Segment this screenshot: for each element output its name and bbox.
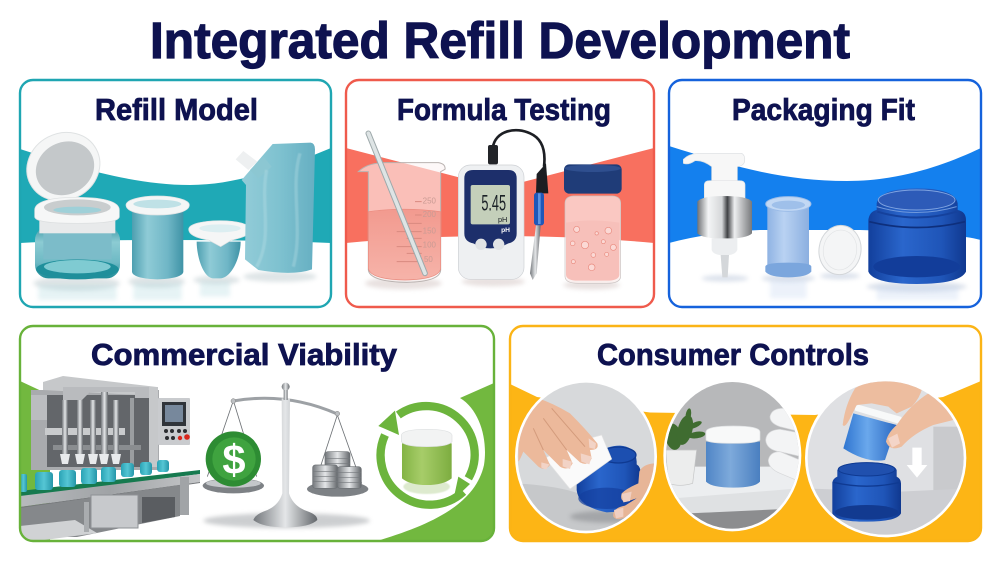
band: green corners <box>20 381 494 541</box>
photo: jar on shelf <box>663 377 803 533</box>
filling line machine <box>20 376 200 542</box>
artwork: balance scale and recycling jar: $ <box>222 436 246 483</box>
band: yellow field <box>510 381 981 541</box>
photo: wiping the jar <box>513 377 660 537</box>
lab items: beaker, pH meter and vial: 250 <box>423 196 437 205</box>
band: blue wave <box>669 146 981 243</box>
components: pump, inner cup, disc and blue jar <box>683 153 967 300</box>
band: teal wave <box>20 148 331 243</box>
heading: formula testing: Formula Testing <box>397 93 611 127</box>
lab items: beaker, pH meter and vial: 5.45 <box>481 191 506 216</box>
lab items: beaker, pH meter and vial: 150 <box>423 226 437 235</box>
artwork: balance scale and recycling jar <box>203 383 475 528</box>
border: yellow <box>510 326 981 541</box>
lab items: beaker, pH meter and vial: pH <box>501 227 510 234</box>
panel: consumer controls <box>510 326 981 541</box>
band: coral wave <box>346 148 654 243</box>
border: coral <box>346 80 654 307</box>
heading: consumer controls: Consumer Controls <box>597 338 869 372</box>
lab items: beaker, pH meter and vial: pH <box>498 215 507 224</box>
panel: commercial viability <box>20 326 494 542</box>
border: blue <box>669 80 981 307</box>
border: teal <box>20 80 331 307</box>
lab items: beaker, pH meter and vial <box>358 130 622 290</box>
products: refill jar, canister, cup and pouch <box>15 120 317 300</box>
border: green <box>20 326 494 541</box>
photo: fitting the refill <box>803 377 970 540</box>
lab items: beaker, pH meter and vial: 100 <box>423 241 437 250</box>
panel: packaging fit <box>669 80 981 307</box>
heading: commercial viability: Commercial Viability <box>91 338 397 372</box>
panel: refill model <box>15 80 331 307</box>
lab items: beaker, pH meter and vial: 200 <box>423 210 437 219</box>
title: Integrated Refill Development <box>150 12 850 69</box>
photos: wipe, store and fit steps <box>513 377 970 540</box>
panel: formula testing <box>346 80 654 307</box>
heading: packaging fit: Packaging Fit <box>732 93 915 127</box>
lab items: beaker, pH meter and vial: 50 <box>424 255 433 264</box>
heading: refill model: Refill Model <box>95 93 258 127</box>
